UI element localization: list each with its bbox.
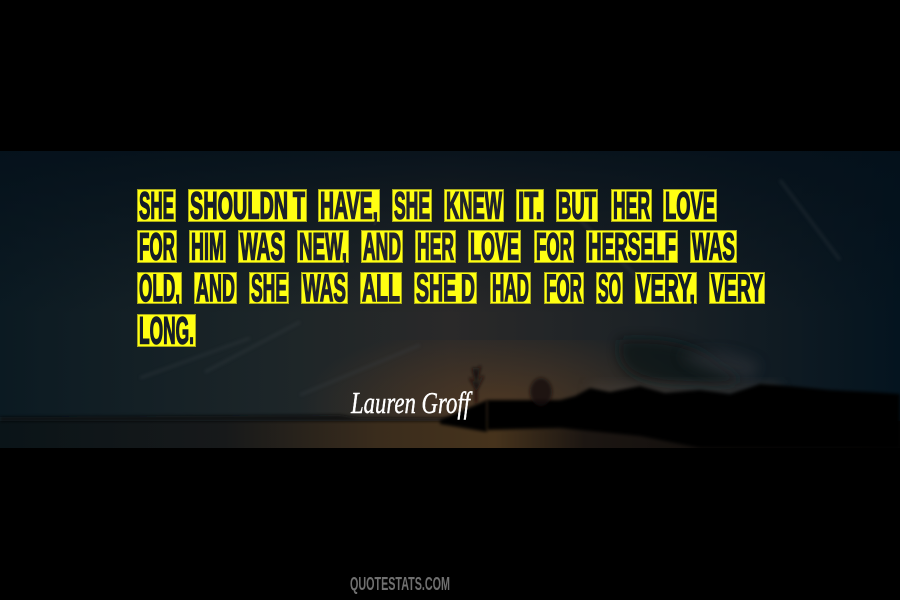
quote line 1 [138, 186, 716, 228]
quote line 1: SHOULDN'T [190, 186, 305, 228]
quote line 2: HER [417, 226, 454, 268]
quote line 3: SO [598, 268, 621, 310]
quote line 1: HER [613, 186, 650, 228]
quote line 3: ALL [362, 268, 400, 310]
quote line 2: WAS [240, 226, 283, 268]
quote line 1: IT. [518, 186, 542, 228]
quote line 1: SHE [139, 186, 174, 228]
quote line 2: HIM [191, 226, 224, 268]
quote line 4 [138, 310, 196, 352]
quote line 2 [138, 226, 736, 268]
quote line 2: LOVE [470, 226, 519, 268]
quote text: LONG. [139, 310, 194, 352]
quote line 1: HAVE, [320, 186, 378, 228]
quote line 3: OLD, [139, 268, 180, 310]
background photo: sunset over water [0, 151, 900, 448]
quote line 2: HERSELF [588, 226, 676, 268]
quote text: LOVE [665, 186, 715, 228]
quote line 3: VERY [711, 268, 763, 310]
quote line 3: SHE'D [416, 268, 475, 310]
quote line 2: NEW, [299, 226, 347, 268]
quote line 3: WAS [303, 268, 346, 310]
quote line 1: BUT [558, 186, 596, 228]
quote text [138, 186, 764, 352]
quote line 1: SHE [394, 186, 430, 228]
quote line 3: SHE [251, 268, 287, 310]
footer site name: QUOTESTATS.COM [350, 574, 450, 594]
quote line 3 [138, 268, 764, 310]
quote line 2: FOR [536, 226, 572, 268]
quote line 2: WAS [692, 226, 735, 268]
quote line 2: FOR [139, 226, 175, 268]
quote line 3: HAD [492, 268, 529, 310]
quote line 3: FOR [546, 268, 582, 310]
quote line 1: KNEW [446, 186, 502, 228]
quote line 2: AND [363, 226, 401, 268]
quote line 3: AND [196, 268, 235, 310]
quote line 3: VERY, [637, 268, 695, 310]
author name: Lauren Groff [350, 385, 473, 420]
